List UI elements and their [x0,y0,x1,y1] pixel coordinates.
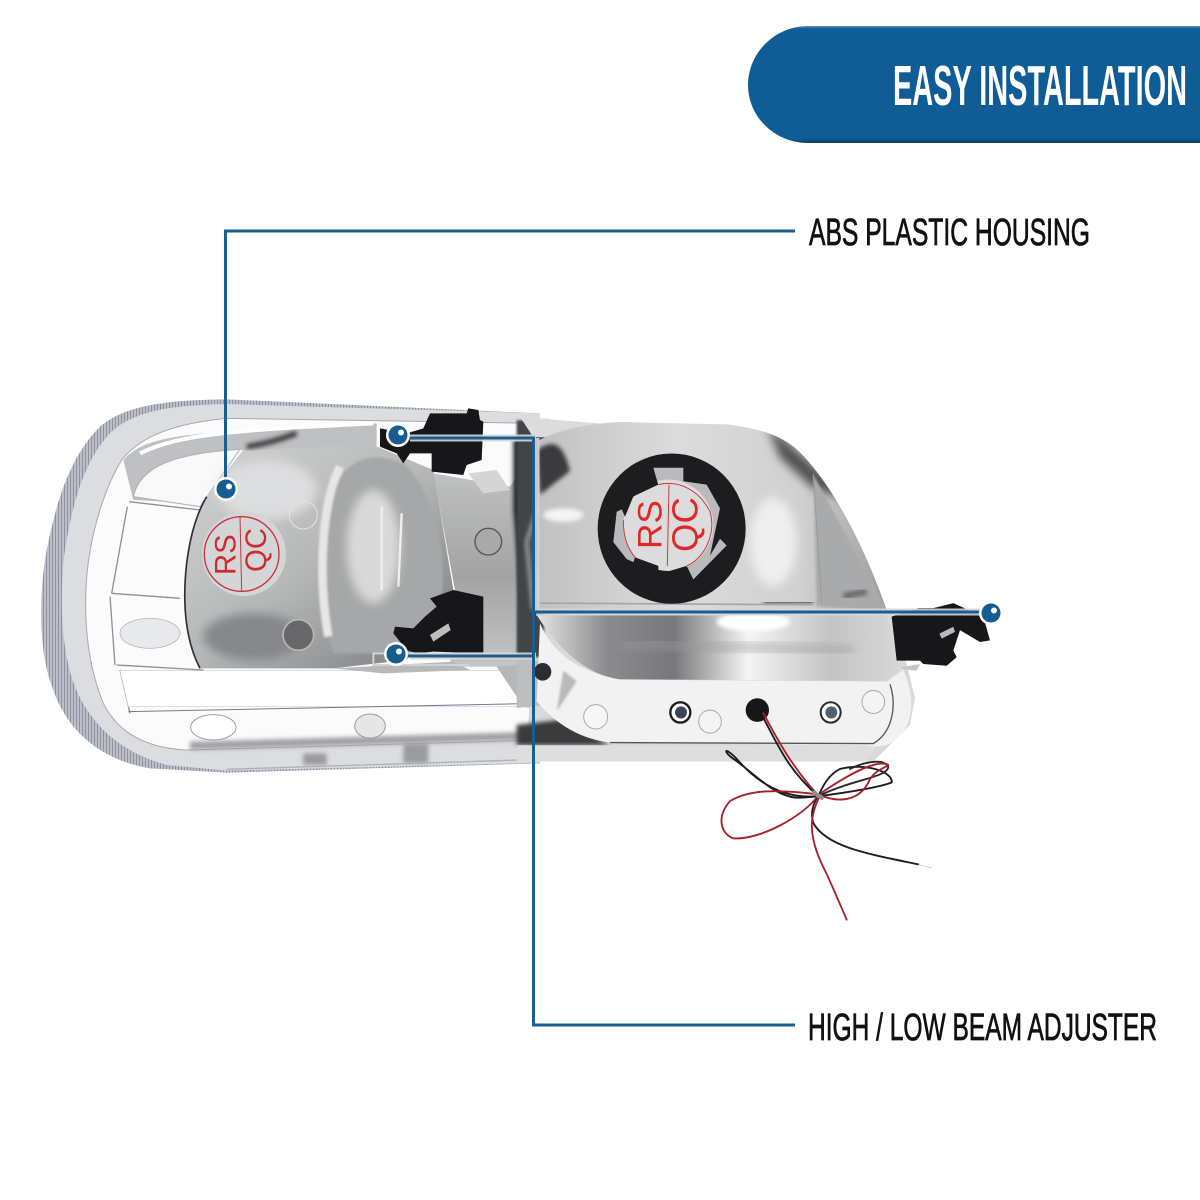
dark gap [517,420,550,657]
housing left half [41,399,540,773]
right bracket section [433,440,540,667]
top shoulder [123,423,377,503]
bottom adjuster clip [393,590,483,653]
mounting holes [534,663,885,733]
callout leader: high low beam adjuster [396,438,990,1025]
lower reflector bowl [537,615,880,681]
center bowl [185,445,453,668]
inner white panels [110,502,203,713]
housing right half [517,417,990,920]
bulb socket: RS [631,500,670,549]
marker dot: bottom adjuster [384,642,408,666]
right adjuster clip [892,603,990,666]
headlight housing product photo [41,399,990,920]
callout leader: abs plastic housing [226,231,795,489]
rubber plug [283,620,314,650]
RS QC sticker: RS [209,534,242,575]
lens rim [41,399,540,773]
marker dot: right adjuster [979,601,1003,625]
marker dot: housing [214,477,238,501]
mounting flange [537,623,911,747]
top adjuster clip [380,408,483,475]
marker dot: top adjuster [386,423,410,447]
bottom base lip [527,610,915,762]
lower white band [120,671,537,707]
leader halo lines [410,438,980,656]
bulb socket [598,453,746,604]
silver flange [62,404,540,771]
easy installation banner [748,26,1200,143]
wiring harness [722,713,932,920]
RS QC sticker [202,512,286,596]
upper reflector bowl [533,420,893,617]
bulb socket: QC [665,497,706,552]
RS QC sticker: QC [240,528,273,572]
wire grommet [746,698,769,722]
